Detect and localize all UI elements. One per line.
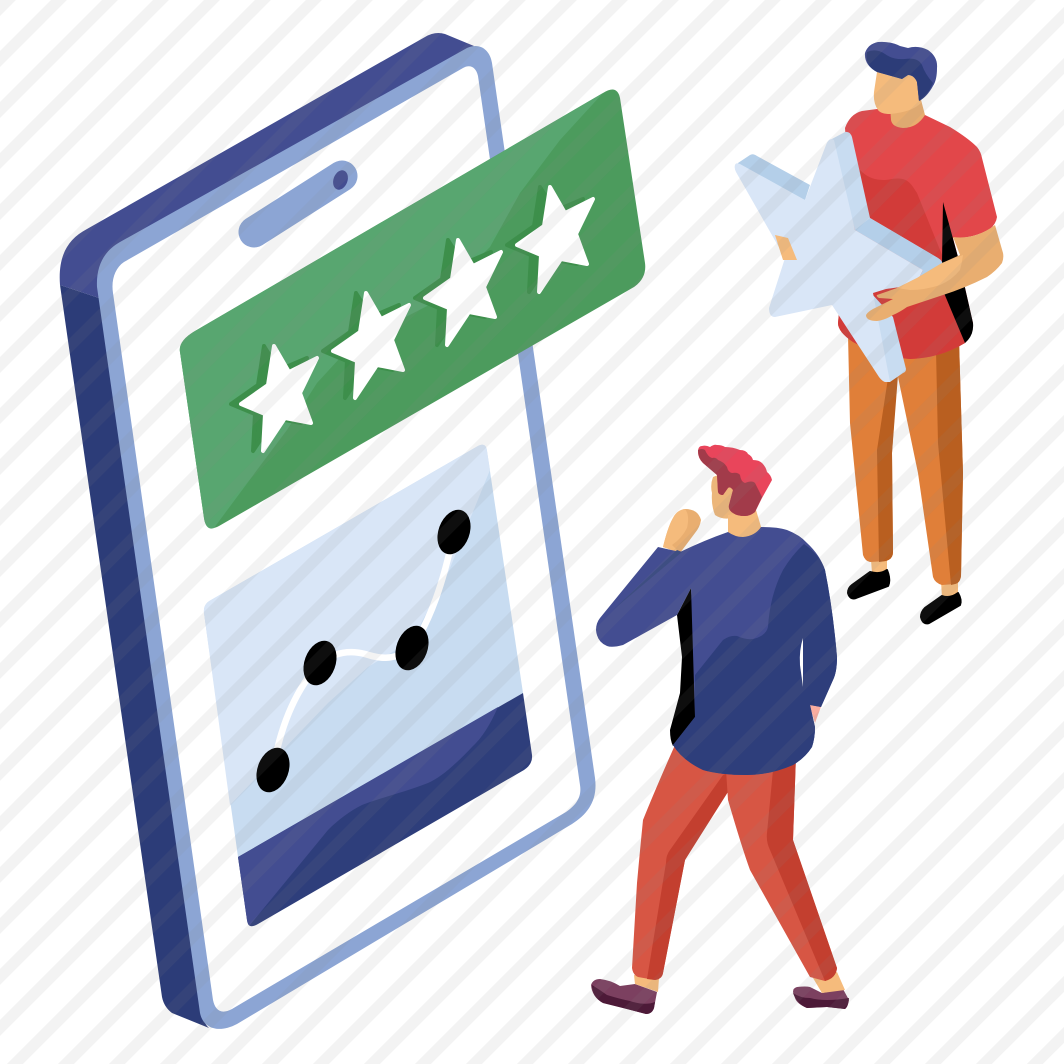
hand highlight [663, 509, 688, 553]
shirt shadow [838, 170, 965, 359]
back leg shadow [767, 755, 837, 981]
chart background [204, 445, 523, 857]
star top side [737, 154, 810, 200]
arm [866, 225, 1003, 321]
ankles [871, 560, 958, 598]
right shoe [921, 593, 961, 623]
back leg [848, 335, 900, 562]
big star [735, 132, 942, 382]
back shoe [793, 986, 849, 1009]
speaker pill [254, 176, 342, 232]
pocket hand [808, 700, 822, 723]
banner base [180, 89, 645, 528]
face [711, 470, 745, 519]
ankles [634, 972, 845, 993]
arm highlight [897, 255, 963, 290]
star lower side [872, 294, 906, 382]
data point 2 [298, 636, 342, 690]
face [874, 72, 921, 114]
hand base [663, 509, 701, 553]
front leg [898, 340, 963, 585]
back shoe upper [793, 986, 849, 1009]
front shoe [591, 979, 657, 1014]
camera dot [331, 168, 350, 192]
sweater shadow [673, 544, 837, 775]
phone side left [60, 285, 209, 1028]
neck [728, 510, 762, 540]
back leg [726, 755, 837, 981]
front shoe upper [591, 979, 657, 1014]
data point 3 [390, 621, 434, 675]
green rating banner [180, 89, 645, 529]
arm gap [800, 638, 803, 687]
front leg shadow [936, 340, 963, 585]
banner highlight [180, 93, 603, 529]
back leg shadow [877, 375, 898, 562]
chart highlight [204, 445, 490, 805]
man holding star [735, 42, 1003, 623]
raised hand [663, 509, 701, 553]
arm base [866, 225, 1003, 321]
phone frame [97, 46, 596, 1029]
star 2 [323, 293, 409, 398]
shirt [838, 109, 997, 359]
front leg [632, 745, 743, 980]
star right side [830, 132, 940, 270]
chart footer [238, 693, 532, 926]
star front face [735, 139, 923, 382]
data point 1 [251, 743, 295, 797]
man looking at phone [591, 445, 849, 1014]
back shoe sole [793, 993, 849, 1009]
hair shadow [866, 50, 933, 101]
star 1 [231, 346, 317, 451]
line chart card [204, 445, 532, 926]
chart footer highlight [238, 707, 498, 925]
left shoe [848, 570, 889, 598]
hair shadow [698, 449, 762, 516]
sweater [596, 527, 837, 775]
front shoe sole [592, 985, 655, 1014]
smartphone [60, 33, 596, 1029]
star 4 [507, 187, 593, 292]
hand behind star [775, 235, 797, 260]
black gap [942, 202, 973, 343]
trend line [273, 532, 454, 770]
hair [865, 42, 937, 101]
front leg shadow [647, 765, 745, 980]
hair [698, 445, 772, 516]
black gap [670, 588, 700, 746]
sleeve crease [613, 550, 682, 610]
neck [890, 96, 925, 128]
data point 4 [432, 505, 476, 559]
star 3 [415, 240, 501, 345]
phone side top [60, 33, 474, 298]
star right side shadow [855, 218, 942, 280]
